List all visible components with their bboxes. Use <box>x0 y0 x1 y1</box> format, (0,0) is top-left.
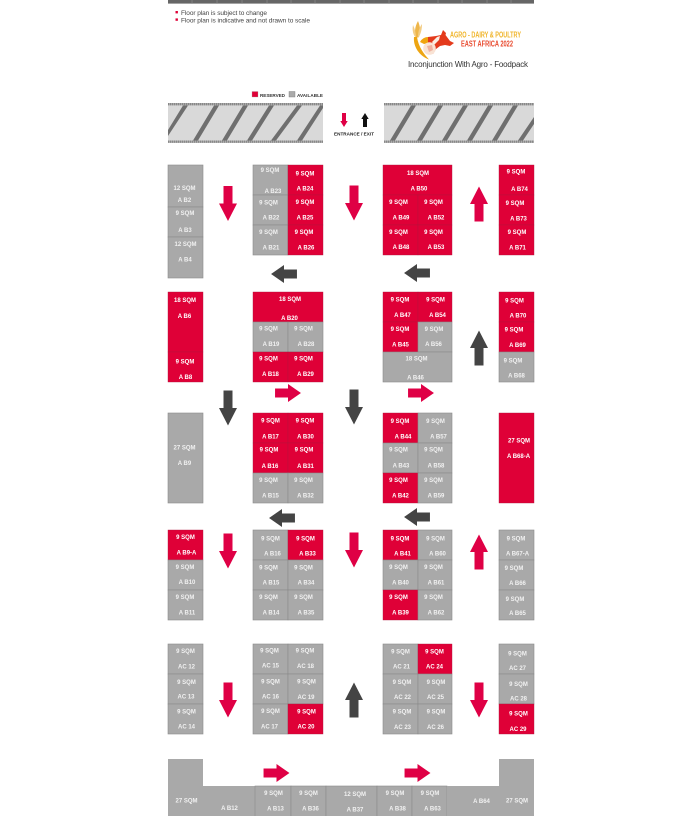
subtitle: Inconjunction With Agro - Foodpack <box>408 60 529 69</box>
panel: right column row 1: A B71 <box>509 246 527 252</box>
panel: block A B39 to A B62: 9 SQM <box>389 595 408 601</box>
panel: right column row 5: 9 SQM <box>508 652 527 658</box>
top wall bar <box>168 0 534 4</box>
panel: block A B15 to A B32: A B17 <box>262 434 280 440</box>
entrance band left <box>168 103 323 143</box>
arrow: red right <box>408 384 434 402</box>
panel: block A B21 to A B26: A B22 <box>263 216 280 222</box>
panel: block A B18 to A B29: A B19 <box>263 342 280 348</box>
panel: block A B21 to A B26: 9 SQM <box>296 172 314 178</box>
panel: block AC 21 to AC 26: AC 22 <box>394 695 412 701</box>
panel: block AC 15 to AC 20: AC 20 <box>297 724 315 730</box>
panel: left column row 1: 12 SQM <box>174 242 197 248</box>
panel: left column row 1: 9 SQM <box>176 211 194 217</box>
legend <box>252 92 323 98</box>
panel: right column row 4: 9 SQM <box>506 597 524 603</box>
panel: block A B15 to A B32: A B32 <box>297 494 315 500</box>
panel: right column row 4: 9 SQM <box>505 566 523 572</box>
panel: block A B48 to A B53: 9 SQM <box>424 230 443 236</box>
panel: block A B45 to A B54: 18 SQM <box>405 356 428 362</box>
panel: block A B15 to A B32: A B31 <box>297 464 315 470</box>
panel: right column row 1: 9 SQM <box>506 201 524 207</box>
notes <box>176 10 310 24</box>
panel: left column row 4: 9 SQM <box>176 595 194 601</box>
arrow: dark down <box>219 390 237 426</box>
icon: exit arrow <box>361 113 369 127</box>
panel: block A B14 to A B35: A B33 <box>299 552 317 558</box>
panel: block A B48 to A B53: 9 SQM <box>389 200 408 206</box>
panel: block A B42 to A B59: A B42 <box>392 494 410 500</box>
panel: left column row 2: 18 SQM <box>174 298 196 304</box>
panel: block A B18 to A B29: 9 SQM <box>294 356 313 362</box>
panel: block A B48 to A B53: A B52 <box>428 216 445 222</box>
panel: block A B45 to A B54: A B46 <box>407 376 425 382</box>
arrow: red right <box>275 384 301 402</box>
arrow: red right <box>405 764 430 782</box>
panel: block AC 21 to AC 26: 9 SQM <box>427 710 445 716</box>
logo wordmark: AGRO - DAIRY & POULTRY <box>450 31 521 40</box>
panel: block A B42 to A B59: 9 SQM <box>389 448 408 454</box>
panel: block A B21 to A B26: 9 SQM <box>296 200 314 206</box>
panel: bottom row: A B63 <box>424 806 442 812</box>
panel: block A B48 to A B53 <box>383 165 452 255</box>
panel: block A B14 to A B35: 9 SQM <box>259 595 278 601</box>
panel: block A B45 to A B54: A B54 <box>429 313 447 319</box>
panel: block A B39 to A B62: A B60 <box>429 552 447 558</box>
panel: bottom row: A B36 <box>302 806 320 812</box>
arrow: dark left <box>404 508 430 526</box>
arrow: red down <box>470 682 488 718</box>
panel: block AC 21 to AC 26: AC 25 <box>427 695 445 701</box>
panel: right column row 2: 9 SQM <box>505 328 523 334</box>
panel: block A B21 to A B26: 9 SQM <box>259 200 278 206</box>
panel: bottom row: 9 SQM <box>386 791 404 797</box>
panel: block AC 15 to AC 20: 9 SQM <box>261 709 280 715</box>
panel: bottom row: A B64 <box>473 799 491 805</box>
panel: right column row 4 <box>499 530 534 620</box>
panel: block A B21 to A B26: A B21 <box>263 246 280 252</box>
panel: block A B45 to A B54 <box>383 292 452 382</box>
panel: block A B21 to A B26: A B24 <box>297 186 314 192</box>
panel: bottom row: 9 SQM <box>299 791 318 797</box>
panel: block A B42 to A B59: A B59 <box>428 494 445 500</box>
panel: right column row 2: 9 SQM <box>504 358 522 364</box>
panel: block AC 21 to AC 26: 9 SQM <box>427 680 445 686</box>
arrows: aisle direction markers <box>219 186 488 782</box>
panel: left column row 1: 12 SQM <box>173 186 196 192</box>
panel: right column row 2: A B70 <box>510 314 527 320</box>
panel: block A B14 to A B35: 9 SQM <box>294 595 313 601</box>
panel: block A B15 to A B32: 9 SQM <box>261 418 280 424</box>
panel: block A B21 to A B26: 9 SQM <box>295 230 313 236</box>
panel: block AC 15 to AC 20: AC 17 <box>261 724 279 730</box>
panel: right column row 3: 27 SQM <box>508 438 530 444</box>
panel: block A B21 to A B26: 9 SQM <box>259 230 278 236</box>
panel: block AC 15 to AC 20: 9 SQM <box>296 648 314 654</box>
panel: right column row 2: 9 SQM <box>505 298 524 304</box>
panel: block A B39 to A B62: 9 SQM <box>389 565 408 571</box>
panel: right column row 3: A B68-A <box>507 454 531 460</box>
panel: left column row 5 <box>168 644 203 734</box>
panel: block A B39 to A B62: A B41 <box>394 552 412 558</box>
panel: right column row 3 <box>499 413 534 503</box>
panel: block A B48 to A B53: A B53 <box>428 245 445 251</box>
panel: block A B42 to A B59: 9 SQM <box>391 419 409 425</box>
panel: block A B15 to A B32 <box>253 413 323 503</box>
panel: block A B18 to A B29: A B29 <box>297 372 315 378</box>
panel: block A B45 to A B54: 9 SQM <box>391 298 409 304</box>
panel: bottom row: 27 SQM <box>175 798 198 804</box>
panel: block A B14 to A B35: 9 SQM <box>296 536 315 542</box>
panel: block AC 21 to AC 26: AC 23 <box>394 725 412 731</box>
panel: bottom row: A B38 <box>389 806 407 812</box>
panel: block A B18 to A B29: A B28 <box>298 342 315 348</box>
panel: right column row 2: A B68 <box>508 374 526 380</box>
arrow: red down <box>219 534 237 568</box>
panel: block A B42 to A B59: A B57 <box>430 434 448 440</box>
panel: block AC 21 to AC 26: 9 SQM <box>393 680 411 686</box>
panel: block AC 15 to AC 20 <box>253 644 323 734</box>
panel: block AC 15 to AC 20: 9 SQM <box>297 710 316 716</box>
panel: block AC 21 to AC 26: AC 24 <box>426 664 444 670</box>
arrow: red down <box>345 186 363 220</box>
panel: left column row 2: A B6 <box>178 314 192 320</box>
panel: left column row 1: A B4 <box>178 258 192 264</box>
arrow: dark left <box>269 509 295 527</box>
panel: left column row 4 <box>168 530 203 620</box>
panel: block A B18 to A B29: 9 SQM <box>259 356 278 362</box>
panel: block A B45 to A B54: 9 SQM <box>425 327 443 333</box>
arrow: red down <box>219 186 237 221</box>
arrow: red down <box>219 682 237 718</box>
panel: block A B42 to A B59: 9 SQM <box>426 419 445 425</box>
panel: block A B48 to A B53: A B50 <box>411 186 428 192</box>
panel: right column row 5: 9 SQM <box>509 682 528 688</box>
icon: entrance arrow <box>340 113 348 127</box>
panel: block A B39 to A B62: A B61 <box>428 580 445 586</box>
panel: block A B18 to A B29: 18 SQM <box>279 297 301 303</box>
panel: right column row 5: AC 29 <box>509 727 527 733</box>
panel: left column row 2: 9 SQM <box>176 360 194 366</box>
panel: block A B18 to A B29: A B20 <box>281 316 299 322</box>
panel: block AC 21 to AC 26 <box>383 644 452 734</box>
panel: block A B14 to A B35: 9 SQM <box>294 566 313 572</box>
panel: block A B48 to A B53: 9 SQM <box>424 200 443 206</box>
panel: bottom row: A B12 <box>221 806 239 812</box>
panel: block A B45 to A B54: 9 SQM <box>391 327 409 333</box>
panel: left column row 5: 9 SQM <box>177 680 196 686</box>
panel: right column row 5: AC 28 <box>510 696 528 702</box>
panel: block A B18 to A B29: 9 SQM <box>259 326 278 332</box>
panel: block A B48 to A B53: A B49 <box>393 216 410 222</box>
panel: left column row 2 <box>168 292 203 382</box>
panel: block AC 15 to AC 20: 9 SQM <box>260 648 279 654</box>
panel: block AC 15 to AC 20: 9 SQM <box>261 680 280 686</box>
panel: block A B15 to A B32: A B15 <box>262 494 280 500</box>
panel: block AC 15 to AC 20: AC 18 <box>297 664 315 670</box>
logo <box>413 21 521 60</box>
panel: block AC 21 to AC 26: 9 SQM <box>393 710 411 716</box>
panel: block A B39 to A B62: A B40 <box>392 580 410 586</box>
panel: left column row 3: 27 SQM <box>173 446 196 452</box>
panel: right column row 4: A B67-A <box>506 552 530 558</box>
panel: block A B39 to A B62: 9 SQM <box>424 595 443 601</box>
arrow: dark up <box>470 330 488 366</box>
panel: block A B18 to A B29: 9 SQM <box>294 326 313 332</box>
panel: left column row 3 <box>168 413 203 503</box>
panel: right column row 2: A B69 <box>509 343 527 349</box>
arrow: red right <box>264 764 289 782</box>
panel: block A B42 to A B59: 9 SQM <box>389 478 408 484</box>
panel: right column row 1: 9 SQM <box>508 230 526 236</box>
panel: left column row 5: AC 12 <box>178 664 196 670</box>
panel: bottom row: 9 SQM <box>264 791 283 797</box>
panel: block A B45 to A B54: A B47 <box>394 313 412 319</box>
panel: block AC 15 to AC 20: AC 16 <box>262 694 280 700</box>
panel: left column row 4: A B10 <box>179 580 196 586</box>
panel: bottom row: 12 SQM <box>344 792 366 798</box>
panel: left column row 5: AC 13 <box>177 694 195 700</box>
panel: block A B14 to A B35: A B35 <box>298 610 315 616</box>
panel: block A B14 to A B35: A B16 <box>264 552 282 558</box>
panel: left column row 5: 9 SQM <box>177 710 196 716</box>
panel: left column row 2: A B8 <box>179 375 193 381</box>
panel: block A B42 to A B59: A B43 <box>393 464 410 470</box>
panel: block AC 15 to AC 20: 9 SQM <box>297 680 316 686</box>
panel: block A B21 to A B26: 9 SQM <box>261 168 279 174</box>
panel: right column row 4: 9 SQM <box>507 536 525 542</box>
panel: right column row 5 <box>499 644 534 734</box>
panel: right column row 5: AC 27 <box>509 666 527 672</box>
panel: block AC 21 to AC 26: AC 26 <box>427 725 445 731</box>
panel: block A B14 to A B35: A B15 <box>263 580 280 586</box>
arrow: red up <box>470 534 488 570</box>
panel: block A B48 to A B53: A B48 <box>393 245 410 251</box>
logo: EAST AFRICA 2022 <box>461 39 513 48</box>
panel: block A B42 to A B59: 9 SQM <box>424 478 443 484</box>
panel: block A B15 to A B32: A B30 <box>297 434 315 440</box>
notes: Floor plan is subject to change <box>181 10 267 17</box>
panel: block A B45 to A B54: A B56 <box>425 342 443 348</box>
panel: block A B21 to A B26: A B26 <box>298 246 315 252</box>
panel: block A B21 to A B26 <box>253 165 323 255</box>
arrow: dark up <box>345 682 363 718</box>
panel: right column row 1: A B73 <box>510 216 528 222</box>
panel: left column row 1: A B2 <box>178 198 192 204</box>
panel: block A B15 to A B32: 9 SQM <box>259 478 278 484</box>
panel: left column row 4: 9 SQM <box>176 565 194 571</box>
panel: block A B39 to A B62: 9 SQM <box>426 536 445 542</box>
panel: block AC 15 to AC 20: AC 19 <box>297 695 315 701</box>
panel: left column row 5: 9 SQM <box>176 649 195 655</box>
panel: block A B15 to A B32: A B16 <box>262 464 279 470</box>
panel: block AC 15 to AC 20: AC 15 <box>262 664 280 670</box>
legend: RESERVED <box>260 93 286 98</box>
panel: block A B15 to A B32: 9 SQM <box>294 478 313 484</box>
panel: left column row 1: A B3 <box>178 228 192 234</box>
panel: block A B42 to A B59: A B44 <box>395 434 412 440</box>
arrow: dark down <box>345 390 363 424</box>
panel: block A B15 to A B32: 9 SQM <box>295 448 313 454</box>
entrance band right <box>384 103 534 143</box>
entrance label: ENTRANCE / EXIT <box>334 132 374 137</box>
panel: block A B39 to A B62: 9 SQM <box>391 536 409 542</box>
panel: block A B21 to A B26: A B23 <box>265 189 282 195</box>
notes: Floor plan is indicative and not drawn to scale <box>181 17 310 24</box>
panel: block A B21 to A B26: A B25 <box>297 216 314 222</box>
panel: bottom row: A B13 <box>267 806 285 812</box>
panel: block AC 21 to AC 26: 9 SQM <box>425 650 444 656</box>
icon: wheat, circle and cow head <box>413 21 454 60</box>
panel: block AC 21 to AC 26: 9 SQM <box>391 650 410 656</box>
panel: block A B48 to A B53: 18 SQM <box>407 171 429 177</box>
panel: bottom row: A B37 <box>347 808 364 814</box>
panel: left column row 1 <box>168 165 203 278</box>
legend: AVAILABLE <box>297 93 323 98</box>
panel: block A B48 to A B53: 9 SQM <box>389 230 408 236</box>
arrow: dark left <box>404 264 430 282</box>
panel: block A B45 to A B54: 9 SQM <box>426 298 445 304</box>
panel: block A B18 to A B29 <box>253 292 323 382</box>
panel: right column row 4: A B66 <box>509 581 527 587</box>
panel: left column row 5: AC 14 <box>178 724 196 730</box>
panel: block A B14 to A B35: A B14 <box>263 610 280 616</box>
panel: left column row 3: A B9 <box>178 461 192 467</box>
panel: bottom row <box>168 759 534 816</box>
panel: right column row 2 <box>499 292 534 382</box>
panel: block A B42 to A B59: 9 SQM <box>424 448 443 454</box>
panel: block A B14 to A B35 <box>253 530 323 620</box>
arrow: red down <box>345 532 363 568</box>
entrance and exit key <box>334 113 374 137</box>
panel: block A B14 to A B35: A B34 <box>298 580 315 586</box>
panel: left column row 4: A B11 <box>179 610 196 616</box>
panel: right column row 1: 9 SQM <box>507 170 525 176</box>
panel: bottom row: 27 SQM <box>506 798 528 804</box>
panel: block A B42 to A B59: A B58 <box>428 464 445 470</box>
panel: block A B39 to A B62 <box>383 530 452 620</box>
panel: block A B14 to A B35: 9 SQM <box>261 536 280 542</box>
panel: right column row 4: A B65 <box>509 611 527 617</box>
panel: right column row 1 <box>499 165 534 255</box>
panel: block A B39 to A B62: A B62 <box>428 610 445 616</box>
panel: block AC 21 to AC 26: AC 21 <box>393 664 411 670</box>
arrow: red up <box>470 186 488 222</box>
panel: left column row 4: A B9-A <box>177 550 197 556</box>
panel: right column row 1: A B74 <box>511 187 529 193</box>
panel: block A B39 to A B62: A B39 <box>392 610 410 616</box>
panel: block A B15 to A B32: 9 SQM <box>260 448 278 454</box>
arrow: dark left <box>271 265 297 283</box>
panel: block A B39 to A B62: 9 SQM <box>424 565 443 571</box>
panel: left column row 4: 9 SQM <box>176 535 195 541</box>
panel: block A B15 to A B32: 9 SQM <box>296 418 314 424</box>
panel: block A B42 to A B59 <box>383 413 452 503</box>
panel: bottom row: 9 SQM <box>421 791 439 797</box>
panel: block A B45 to A B54: A B45 <box>392 342 410 348</box>
panel: block A B18 to A B29: A B18 <box>262 372 280 378</box>
panel: block A B14 to A B35: 9 SQM <box>259 566 278 572</box>
panel: right column row 5: 9 SQM <box>509 712 528 718</box>
